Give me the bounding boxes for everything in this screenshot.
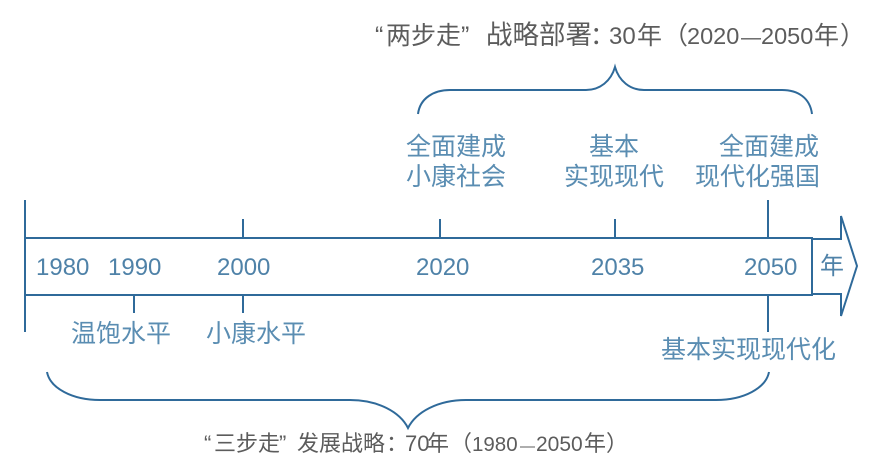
- timeline arrowhead: [812, 216, 857, 316]
- label: 2050 basic modernization: 基本实现现代化: [661, 336, 836, 364]
- heading: three-step strategy: 70: [405, 431, 429, 456]
- label: 2020 milestone: 小康社会: [406, 163, 506, 191]
- heading: two-step strategy: ：: [590, 22, 615, 50]
- heading: two-step strategy: 2020: [687, 23, 739, 49]
- heading: three-step strategy: 2050: [536, 433, 583, 456]
- heading: three-step strategy: “: [204, 431, 211, 456]
- heading: two-step strategy: （: [663, 22, 688, 50]
- heading: three-step strategy: 三步走: [214, 431, 280, 456]
- heading: two-step strategy: 2050: [761, 23, 813, 49]
- heading: three-step strategy: 发展战略: [297, 431, 385, 456]
- heading: three-step strategy: ：: [386, 431, 408, 456]
- label: 2035 milestone: 实现现代: [564, 163, 664, 191]
- heading: three-step strategy: （: [450, 431, 472, 456]
- heading: three-step strategy: ）: [606, 431, 628, 456]
- year labels: 2020: [416, 254, 469, 281]
- label: 2000 level: 小康水平: [206, 320, 306, 348]
- heading: two-step strategy: 年: [814, 22, 839, 50]
- heading: two-step strategy: ）: [840, 22, 865, 50]
- label: 2050 milestone: 全面建成: [719, 133, 819, 161]
- label: 2050 milestone: 现代化强国: [695, 163, 820, 191]
- heading: three-step strategy: —: [520, 438, 535, 455]
- bottom brace: [47, 372, 769, 428]
- year labels: 2035: [591, 254, 644, 281]
- heading: two-step strategy: ”: [461, 22, 469, 50]
- year labels: 2050: [744, 254, 797, 281]
- heading: three-step strategy: 年: [427, 431, 449, 456]
- top brace: [418, 67, 812, 114]
- heading: three-step strategy: 1980: [472, 433, 518, 456]
- year labels: 2000: [217, 254, 270, 281]
- year labels: [36, 253, 844, 281]
- heading: two-step strategy: “: [375, 22, 383, 50]
- heading: three-step strategy: 年: [584, 431, 606, 456]
- year labels: 年: [820, 253, 844, 280]
- heading: two-step strategy: 30: [609, 23, 636, 50]
- heading: three-step strategy: ”: [279, 431, 286, 456]
- heading: two-step strategy: 战略部署: [486, 20, 592, 50]
- timeline bar: [25, 200, 812, 332]
- year labels: 1990: [108, 254, 161, 281]
- label: 2035 milestone: 基本: [589, 133, 639, 161]
- heading: two-step strategy: 年: [637, 22, 662, 50]
- label: 1990 level: 温饱水平: [71, 320, 171, 348]
- year labels: 1980: [36, 254, 89, 281]
- label: 2020 milestone: 全面建成: [406, 133, 506, 161]
- heading: two-step strategy: —: [741, 27, 761, 49]
- heading: two-step strategy: 两步走: [386, 22, 461, 50]
